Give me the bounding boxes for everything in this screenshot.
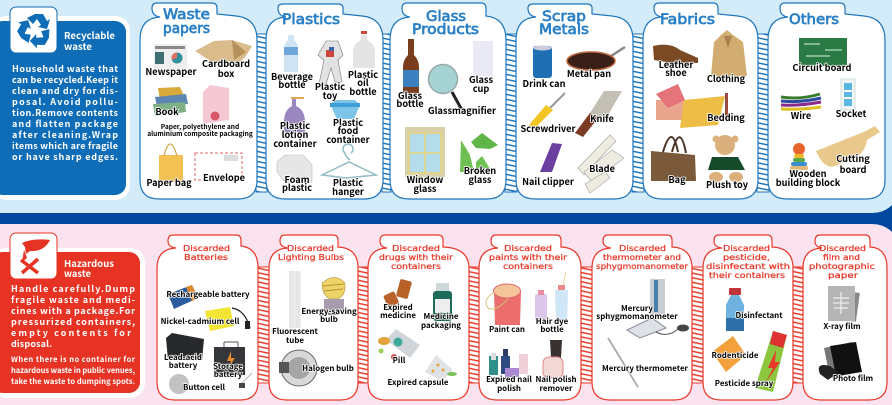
item: nickel-cadmium cell xyxy=(161,307,250,331)
heading: discarded film xyxy=(809,244,875,280)
heading: discarded lighting bulbs: Lighting Bulbs xyxy=(278,253,344,262)
item: expired medicine xyxy=(380,279,416,321)
item: wooden building block: building block xyxy=(776,175,841,189)
item: paper bag xyxy=(146,144,192,189)
heading: discarded pesticide: Discarded xyxy=(723,244,770,253)
item: paper bag: Paper bag xyxy=(146,175,192,189)
panel: others xyxy=(768,3,885,199)
item: leather shoe: Leather xyxy=(659,57,693,71)
item: bedding: Bedding xyxy=(707,110,745,124)
panel: discarded drugs with their containers xyxy=(368,235,469,400)
item: leather shoe xyxy=(653,45,698,79)
item: x-ray film: X-ray film xyxy=(823,321,861,332)
item: wooden building block xyxy=(776,143,841,189)
item: window glass xyxy=(405,127,445,195)
heading: waste papers: Waste xyxy=(163,7,210,23)
item: circuit board: Circuit board xyxy=(793,60,852,74)
item: wire: Wire xyxy=(791,108,811,122)
text block: recyclable description: Household waste that xyxy=(12,62,118,75)
item: wire xyxy=(781,94,821,122)
item: paint can: Paint can xyxy=(489,324,525,335)
panel: discarded thermometer and sphygmomanometer xyxy=(592,235,692,400)
icon: hazardous symbol xyxy=(10,233,57,279)
panel: scrap metals xyxy=(516,4,633,199)
panel: recyclable waste xyxy=(0,7,130,200)
item: plastic toy: toy xyxy=(323,88,338,102)
panel: waste papers xyxy=(140,3,257,199)
heading: discarded paints: containers xyxy=(503,262,553,271)
item: nickel-cadmium cell: Nickel-cadmium cell xyxy=(161,316,240,327)
heading: glass products xyxy=(412,9,479,38)
item: broken glass xyxy=(460,133,498,186)
item: pill: Pill xyxy=(393,355,406,366)
item: knife: Knife xyxy=(590,111,614,125)
heading: glass products: Glass xyxy=(426,9,466,25)
heading: discarded batteries xyxy=(183,244,230,262)
item: knife xyxy=(575,91,622,137)
heading: discarded pesticide xyxy=(706,244,790,280)
item: envelope xyxy=(195,153,245,184)
heading: waste papers xyxy=(163,7,210,37)
item: mercury thermometer xyxy=(602,338,689,387)
text block: hazardous description: fragile waste and medi- xyxy=(11,293,135,306)
text block: hazardous description: When there is no container for xyxy=(11,354,136,365)
heading: discarded paints xyxy=(489,244,568,271)
heading: discarded pesticide: pesticide, xyxy=(723,253,770,262)
item: glass cup: cup xyxy=(473,81,489,95)
item: expired nail polish xyxy=(486,349,532,394)
item: cutting board xyxy=(816,126,880,176)
item: broken glass: Broken xyxy=(464,163,496,177)
item: fluorescent tube xyxy=(272,271,319,346)
item: hair dye bottle xyxy=(535,272,569,335)
item: plastic lotion container: Plastic xyxy=(280,118,310,132)
item: photo film: Photo film xyxy=(833,373,874,384)
text block: hazardous description: disposal. xyxy=(11,337,52,350)
item: wooden building block: Wooden xyxy=(789,166,827,180)
heading: discarded film: film and xyxy=(823,253,860,262)
item: energy-saving bulb: bulb xyxy=(320,314,338,325)
heading: scrap metals: Scrap xyxy=(542,9,586,25)
item: plastic oil bottle: oil xyxy=(357,75,369,89)
text block: recyclable description: after cleaning.Wrap xyxy=(12,128,118,141)
item: cardboard box xyxy=(195,40,252,80)
item: hair dye bottle: bottle xyxy=(540,324,564,335)
item: blade xyxy=(578,135,624,193)
heading: discarded lighting bulbs xyxy=(278,244,344,262)
item: energy-saving bulb xyxy=(301,278,357,325)
item: nail polish remover: remover xyxy=(540,383,573,394)
heading: discarded drugs: drugs with their xyxy=(379,253,454,262)
text block: hazardous description: hazardous waste in public venues, xyxy=(11,365,136,376)
item: rechargeable battery xyxy=(166,285,250,309)
panel: hazardous waste xyxy=(0,233,145,398)
item: foam plastic xyxy=(277,155,312,194)
heading: waste papers: papers xyxy=(163,21,210,37)
heading: discarded film: photographic xyxy=(809,262,875,271)
item: screwdriver: Screwdriver xyxy=(521,121,575,135)
heading: scrap metals: Metals xyxy=(539,22,589,38)
item: glass magnifier xyxy=(428,64,496,117)
item: paint can xyxy=(486,284,525,335)
item: bag: Bag xyxy=(668,172,686,186)
item: halogen bulb: Halogen bulb xyxy=(302,363,354,374)
item: lead-acid battery: Lead-acid xyxy=(164,352,202,363)
text block: recyclable description: or have sharp edges. xyxy=(12,150,118,163)
item: plastic toy: Plastic xyxy=(315,79,345,93)
item: button cell xyxy=(169,373,252,394)
text block: recyclable description: clean and dry for dis- xyxy=(12,84,118,97)
item: beverage bottle: bottle xyxy=(278,77,306,91)
text block: recyclable description: can be recycled.Keep it xyxy=(12,73,118,86)
item: expired capsule: Expired capsule xyxy=(388,377,449,388)
item: cutting board: board xyxy=(840,162,866,176)
panel: plastics xyxy=(266,4,383,199)
heading: discarded thermometer: Discarded xyxy=(619,244,666,253)
text block: recyclable description xyxy=(12,62,119,163)
item: metal pan xyxy=(567,47,625,80)
panel: glass products xyxy=(390,3,506,199)
item: plastic hanger: hanger xyxy=(332,184,364,198)
item: glass bottle: Glass xyxy=(398,88,422,102)
item: rodenticide: Rodenticide xyxy=(712,350,759,361)
item: newspaper: Newspaper xyxy=(145,64,197,78)
panel: discarded film and photographic paper xyxy=(803,235,887,400)
item: plastic oil bottle: Plastic xyxy=(348,67,378,81)
item: bedding xyxy=(656,84,745,128)
item: bag xyxy=(651,137,696,186)
item: fluorescent tube: tube xyxy=(286,335,304,346)
item: expired nail polish: Expired nail xyxy=(486,374,532,385)
item: hair dye bottle: Hair dye xyxy=(536,316,569,327)
item: mercury thermometer: Mercury thermometer xyxy=(602,363,689,374)
heading: discarded film: paper xyxy=(828,271,859,280)
item: glass bottle xyxy=(396,39,424,110)
item: plastic lotion container: container xyxy=(273,136,317,150)
item: plastic hanger xyxy=(322,144,376,198)
heading: recyclable waste: Recyclable xyxy=(64,28,115,42)
item: disinfectant: Disinfectant xyxy=(735,310,783,321)
item: button cell: Button cell xyxy=(183,382,226,393)
panel: discarded pesticide and disinfectant xyxy=(703,235,793,400)
item: storage battery xyxy=(213,342,245,380)
heading: others: Others xyxy=(789,12,839,28)
item: disinfectant xyxy=(726,288,783,331)
item: window glass: Window xyxy=(407,172,443,186)
item: glass magnifier: Glassmagnifier xyxy=(428,103,496,117)
item: nail clipper: Nail clipper xyxy=(522,174,574,188)
item: storage battery: battery xyxy=(214,369,243,380)
item: expired medicine: medicine xyxy=(380,310,416,321)
item: book xyxy=(153,87,188,118)
item: composite carton: Paper, polyethylene and xyxy=(161,121,239,131)
heading: discarded paints: paints with their xyxy=(489,253,568,262)
item: foam plastic: Foam xyxy=(284,172,310,186)
item: nail clipper xyxy=(522,143,574,188)
item: energy-saving bulb: Energy-saving xyxy=(301,306,357,317)
text block: recyclable description: items which are fragile xyxy=(12,139,118,152)
item: mercury sphygmomanometer xyxy=(596,279,689,338)
heading: discarded lighting bulbs: Discarded xyxy=(287,244,334,253)
heading: scrap metals xyxy=(539,9,589,38)
item: envelope: Envelope xyxy=(203,170,245,184)
item: plastic food container: container xyxy=(326,132,370,146)
heading: discarded pesticide: their containers xyxy=(709,271,785,280)
text block: hazardous description xyxy=(11,282,136,387)
item: composite carton xyxy=(147,85,253,138)
heading: fabrics: Fabrics xyxy=(660,12,715,28)
heading: hazardous waste: waste xyxy=(64,266,91,280)
item: halogen bulb xyxy=(279,350,354,386)
item: newspaper xyxy=(145,44,197,78)
item: plastic oil bottle: bottle xyxy=(349,84,377,98)
item: pill xyxy=(378,329,420,366)
panel: discarded paints with their containers xyxy=(479,235,581,400)
text block: recyclable description: and flatten package xyxy=(12,117,118,130)
item: plastic hanger: Plastic xyxy=(333,175,363,189)
text block: recyclable description: posal. Avoid pollu- xyxy=(12,95,118,108)
item: socket xyxy=(836,79,866,120)
item: plush toy xyxy=(706,135,749,191)
item: foam plastic: plastic xyxy=(282,180,312,194)
item: mercury sphygmomanometer: Mercury xyxy=(621,303,653,314)
heading: discarded batteries: Batteries xyxy=(184,253,228,262)
heading: discarded pesticide: disinfectant with xyxy=(706,262,790,271)
item: plastic lotion container: lotion xyxy=(282,127,308,141)
heading: discarded thermometer: sphygmomanometer xyxy=(596,262,689,271)
item: pesticide spray xyxy=(715,331,787,392)
heading: hazardous waste xyxy=(64,256,114,280)
item: x-ray film xyxy=(823,286,861,332)
item: fluorescent tube: Fluorescent xyxy=(272,326,319,337)
item: nail polish remover xyxy=(535,340,577,394)
item: medicine packaging: Medicine xyxy=(424,311,459,322)
heading: discarded drugs: containers xyxy=(391,262,441,271)
heading: discarded drugs xyxy=(379,244,454,271)
item: pesticide spray: Pesticide spray xyxy=(715,378,774,389)
heading: discarded batteries: Discarded xyxy=(183,244,230,253)
panel: discarded batteries xyxy=(157,235,258,400)
heading: glass products: Products xyxy=(412,22,479,38)
item: cardboard box: Cardboard xyxy=(202,56,250,70)
item: beverage bottle xyxy=(271,35,313,91)
item: medicine packaging xyxy=(421,283,461,331)
text block: hazardous description: cines with a package.For xyxy=(11,304,135,317)
item: lead-acid battery xyxy=(164,333,204,371)
item: beverage bottle: Beverage xyxy=(271,69,313,83)
item: glass bottle: bottle xyxy=(396,96,424,110)
item: circuit board xyxy=(793,38,852,74)
item: expired nail polish: polish xyxy=(497,383,521,394)
item: plastic lotion container xyxy=(273,97,317,150)
item: blade: Blade xyxy=(589,161,615,175)
divider band xyxy=(0,205,892,232)
item: rodenticide xyxy=(712,336,759,372)
item: plastic food container xyxy=(326,100,370,146)
heading: hazardous waste: Hazardous xyxy=(64,256,114,270)
item: photo film xyxy=(819,342,874,384)
heading: plastics: Plastics xyxy=(282,12,340,28)
item: clothing: Clothing xyxy=(707,71,746,85)
item: lead-acid battery: battery xyxy=(169,360,198,371)
item: drink can: Drink can xyxy=(523,76,566,90)
item: plastic food container: Plastic xyxy=(333,115,363,129)
heading: discarded drugs: Discarded xyxy=(392,244,440,253)
item: expired capsule xyxy=(388,355,457,388)
text block: hazardous description: take the waste to dumping spots. xyxy=(11,376,135,387)
item: book: Book xyxy=(155,104,179,118)
heading: discarded thermometer xyxy=(596,244,689,271)
item: storage battery: Storage xyxy=(213,361,243,372)
heading: discarded thermometer: thermometer and xyxy=(603,253,681,262)
item: plastic toy xyxy=(315,41,345,102)
item: leather shoe: shoe xyxy=(665,65,687,79)
item: plastic food container: food xyxy=(338,123,358,137)
item: metal pan: Metal pan xyxy=(567,66,611,80)
item: mercury sphygmomanometer: sphygmomanometer xyxy=(596,311,678,322)
text block: hazardous description: Handle carefully.Dump xyxy=(11,282,135,295)
item: glass cup xyxy=(469,41,493,95)
item: screwdriver xyxy=(521,93,575,135)
item: plush toy: Plush toy xyxy=(706,177,749,191)
heading: discarded film: Discarded xyxy=(819,244,866,253)
item: expired medicine: Expired xyxy=(383,302,413,313)
text block: recyclable description: tion.Remove contents xyxy=(12,106,119,119)
heading: discarded paints: Discarded xyxy=(504,244,552,253)
item: medicine packaging: packaging xyxy=(421,320,461,331)
item: glass cup: Glass xyxy=(469,72,493,86)
item: composite carton: aluminium composite packaging xyxy=(147,128,253,138)
panel: fabrics xyxy=(643,3,758,199)
panel: discarded lighting bulbs xyxy=(269,235,358,400)
icon: recycle symbol xyxy=(10,7,57,53)
item: broken glass: glass xyxy=(469,172,492,186)
item: cutting board: Cutting xyxy=(836,151,870,165)
heading: recyclable waste xyxy=(64,28,115,53)
text block: hazardous description: pressurized containers, xyxy=(11,315,135,328)
item: window glass: glass xyxy=(414,181,437,195)
item: clothing xyxy=(707,30,747,85)
heading: recyclable waste: waste xyxy=(64,39,92,53)
text block: hazardous description: empty contents for xyxy=(11,326,131,339)
item: socket: Socket xyxy=(836,106,866,120)
item: drink can xyxy=(523,46,566,90)
item: plastic oil bottle xyxy=(348,31,378,98)
item: rechargeable battery: Rechargeable battery xyxy=(166,289,250,300)
item: nail polish remover: Nail polish xyxy=(535,374,577,385)
item: cardboard box: box xyxy=(218,66,234,80)
